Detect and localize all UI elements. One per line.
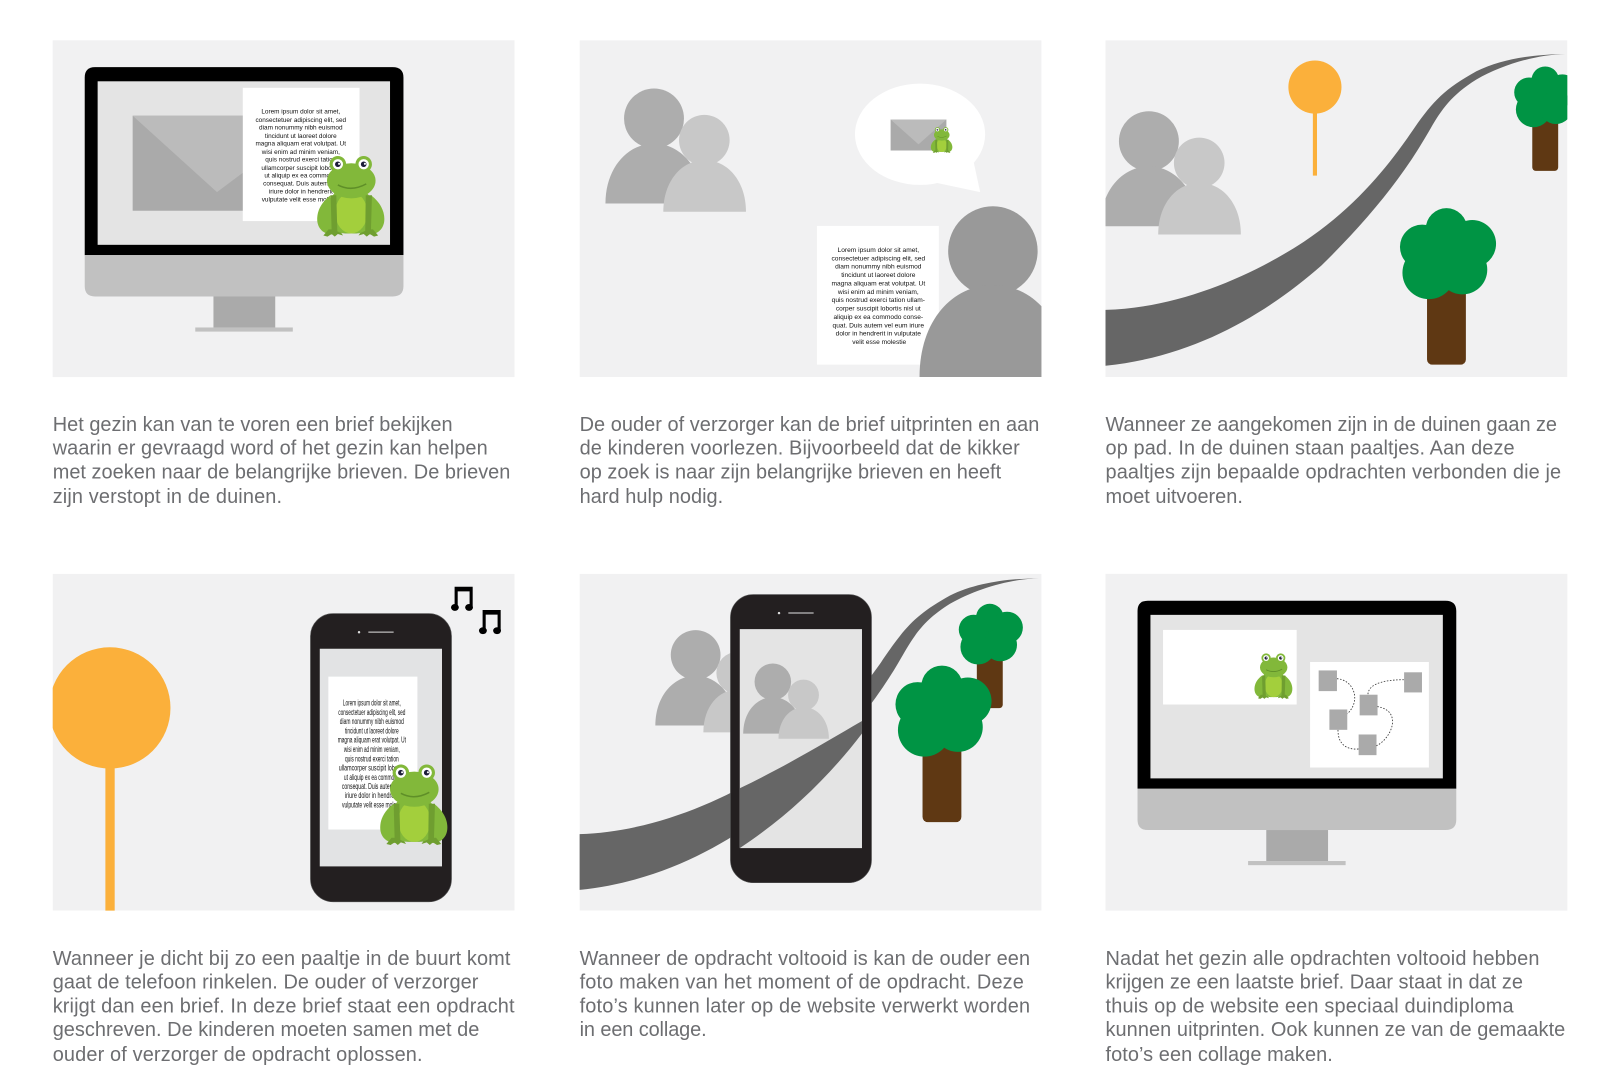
caption 5: foto’s kunnen later op de website verwerkt worden (580, 995, 1030, 1017)
icon: large parent silhouette (920, 206, 1042, 377)
icon: small tree (1514, 66, 1568, 171)
road (579, 578, 1041, 890)
letter with lorem ipsum text: consequat. Duis autem vel (263, 180, 338, 187)
letter with lorem ipsum text: quat. Duis autem vel eum iriure (833, 322, 924, 329)
caption 2: op zoek is naar zijn belangrijke brieven en heeft (580, 461, 1002, 483)
letter with lorem ipsum text: iriure dolor in hendrerit (269, 189, 333, 196)
icon: music note (479, 610, 501, 634)
icon: large tree (1400, 208, 1496, 365)
caption 2: hard hulp nodig. (580, 486, 723, 508)
diploma card with frog (1163, 630, 1297, 705)
icon: smartphone (730, 595, 871, 883)
caption 3: paaltjes zijn bepaalde opdrachten verbonden die je (1106, 461, 1561, 483)
letter with lorem ipsum text: tincidunt ut laoreet dolore (841, 272, 916, 279)
letter with lorem ipsum text: magna aliquam erat volutpat. Ut (831, 281, 925, 288)
caption 6: krijgen ze een laatste brief. Daar staat in dat ze (1106, 972, 1523, 994)
icon: family (655, 630, 730, 732)
panel: taking a photo (579, 574, 1041, 911)
caption 3: moet uitvoeren. (1106, 486, 1243, 508)
phone screen with letter: iriure dolor in hendrerit (345, 791, 399, 800)
letter with lorem ipsum text: magna aliquam erat volutpat. Ut (255, 141, 346, 148)
caption 5: foto maken van het moment of de opdracht. Deze (580, 972, 1024, 994)
caption 4: geschreven. De kinderen moeten samen met de (53, 1019, 479, 1041)
phone screen with letter: quis nostrud exerci tation (345, 754, 399, 763)
letter with lorem ipsum text: Lorem ipsum dolor sit amet, (838, 247, 919, 254)
letter with lorem ipsum text: diam nonummy nibh euismod (259, 125, 343, 132)
caption 1: zijn verstopt in de duinen. (53, 486, 282, 508)
letter with lorem ipsum text: Lorem ipsum dolor sit amet, (261, 109, 340, 116)
caption 6: thuis op de website een speciaal duindiploma (1106, 995, 1515, 1017)
letter with lorem ipsum text: velit esse molestie (852, 339, 907, 346)
caption 2: De ouder of verzorger kan de brief uitprinten en aan (580, 414, 1039, 436)
letter with lorem ipsum text: ut aliquip ex ea commodo (264, 173, 338, 180)
road (1106, 54, 1567, 366)
phone screen with letter: consequat. Duis autem vel (342, 782, 402, 791)
panel: parent reading to children (580, 40, 1066, 377)
caption 6: Nadat het gezin alle opdrachten voltooid hebben (1106, 948, 1539, 970)
letter with lorem ipsum text: vulputate velit esse molestie (262, 196, 342, 203)
letter with lorem ipsum text: wisi enim ad minim veniam, (261, 149, 340, 156)
letter with lorem ipsum text: diam nonummy nibh euismod (835, 264, 922, 271)
phone screen with letter: diam nonummy nibh euismod (340, 717, 404, 726)
caption 4: krijgt dan een brief. In deze brief staat een opdracht (53, 995, 515, 1017)
letter with lorem ipsum text (243, 88, 360, 221)
caption 1: Het gezin kan van te voren een brief bekijken (53, 414, 453, 436)
letter with lorem ipsum text: wisi enim ad minim veniam, (837, 289, 919, 296)
icon: frog (317, 156, 384, 237)
icon: orange signpost (49, 647, 170, 911)
caption 4: ouder of verzorger de opdracht oplossen. (53, 1044, 423, 1066)
phone screen with letter: consectetuer adipiscing elit, sed (338, 708, 406, 717)
phone screen with letter: ut aliquip ex ea commodo (344, 773, 400, 782)
caption 4: gaat de telefoon rinkelen. De ouder of verzorger (53, 972, 479, 994)
letter with lorem ipsum text: tincidunt ut laoreet dolore (265, 133, 337, 140)
phone screen with letter: tincidunt ut laoreet dolore (345, 726, 399, 735)
icon: orange signpost (1288, 61, 1341, 176)
letter with lorem ipsum text: consectetuer adipiscing elit, sed (255, 117, 347, 124)
icon: envelope (133, 116, 243, 211)
caption 2: de kinderen voorlezen. Bijvoorbeeld dat de kikker (580, 438, 1020, 460)
caption 5: in een collage. (580, 1019, 707, 1041)
phone screen with letter: magna aliquam erat volutpat. Ut (338, 736, 406, 745)
icon: music note (451, 587, 473, 611)
phone screen with letter (320, 649, 442, 866)
letter with lorem ipsum text: ullamcorper suscipit lobortis (261, 165, 340, 172)
phone screen with letter: wisi enim ad minim veniam, (343, 745, 400, 754)
letter with lorem ipsum text: consectetuer adipiscing elit, sed (831, 255, 925, 262)
panel: website with diploma and collage (1106, 574, 1567, 911)
letter with lorem ipsum text: quis nostrud exerci tation (265, 157, 337, 164)
speech bubble with envelope and frog (855, 84, 985, 192)
phone screen showing photo (740, 629, 862, 848)
icon: parent and child (605, 89, 746, 212)
icon: smartphone (310, 614, 452, 902)
panel: monitor with letter (53, 40, 515, 377)
icon: desktop monitor (1138, 601, 1456, 865)
phone screen with letter: vulputate velit esse molestie (342, 800, 404, 809)
phone screen with letter: ullamcorper suscipit lobortis (339, 764, 405, 773)
panel: walking path in dunes (1100, 40, 1578, 377)
caption 6: kunnen uitprinten. Ook kunnen ze van de gemaakte (1106, 1019, 1565, 1041)
caption 4: Wanneer je dicht bij zo een paaltje in de buurt komt (53, 948, 511, 970)
panel: phone rings near signpost (49, 574, 515, 911)
letter with lorem ipsum text (817, 226, 939, 365)
caption 3: op pad. In de duinen staan paaltjes. Aan deze (1106, 438, 1515, 460)
caption 3: Wanneer ze aangekomen zijn in de duinen gaan ze (1106, 414, 1557, 436)
phone screen with letter: Lorem ipsum dolor sit amet, (343, 699, 401, 708)
caption 5: Wanneer de opdracht voltooid is kan de ouder een (580, 948, 1030, 970)
letter with lorem ipsum text: corper suscipit lobortis nisl ut (836, 305, 921, 312)
letter with lorem ipsum text: dolor in hendrerit in vulputate (836, 331, 921, 338)
icon: family (1100, 111, 1241, 234)
caption 1: met zoeken naar de belangrijke brieven. De brieven (53, 461, 510, 483)
letter with lorem ipsum text: quis nostrud exerci tation ullam- (832, 297, 925, 304)
caption 6: foto’s een collage maken. (1106, 1044, 1333, 1066)
icon: small tree (959, 604, 1023, 708)
collage map card (1310, 662, 1429, 768)
caption 1: waarin er gevraagd word of het gezin kan helpen (52, 438, 488, 460)
letter with lorem ipsum text: aliquip ex ea commodo conse- (833, 314, 923, 321)
icon: large tree (895, 666, 992, 822)
icon: desktop monitor (85, 67, 403, 332)
icon: frog (380, 764, 447, 845)
